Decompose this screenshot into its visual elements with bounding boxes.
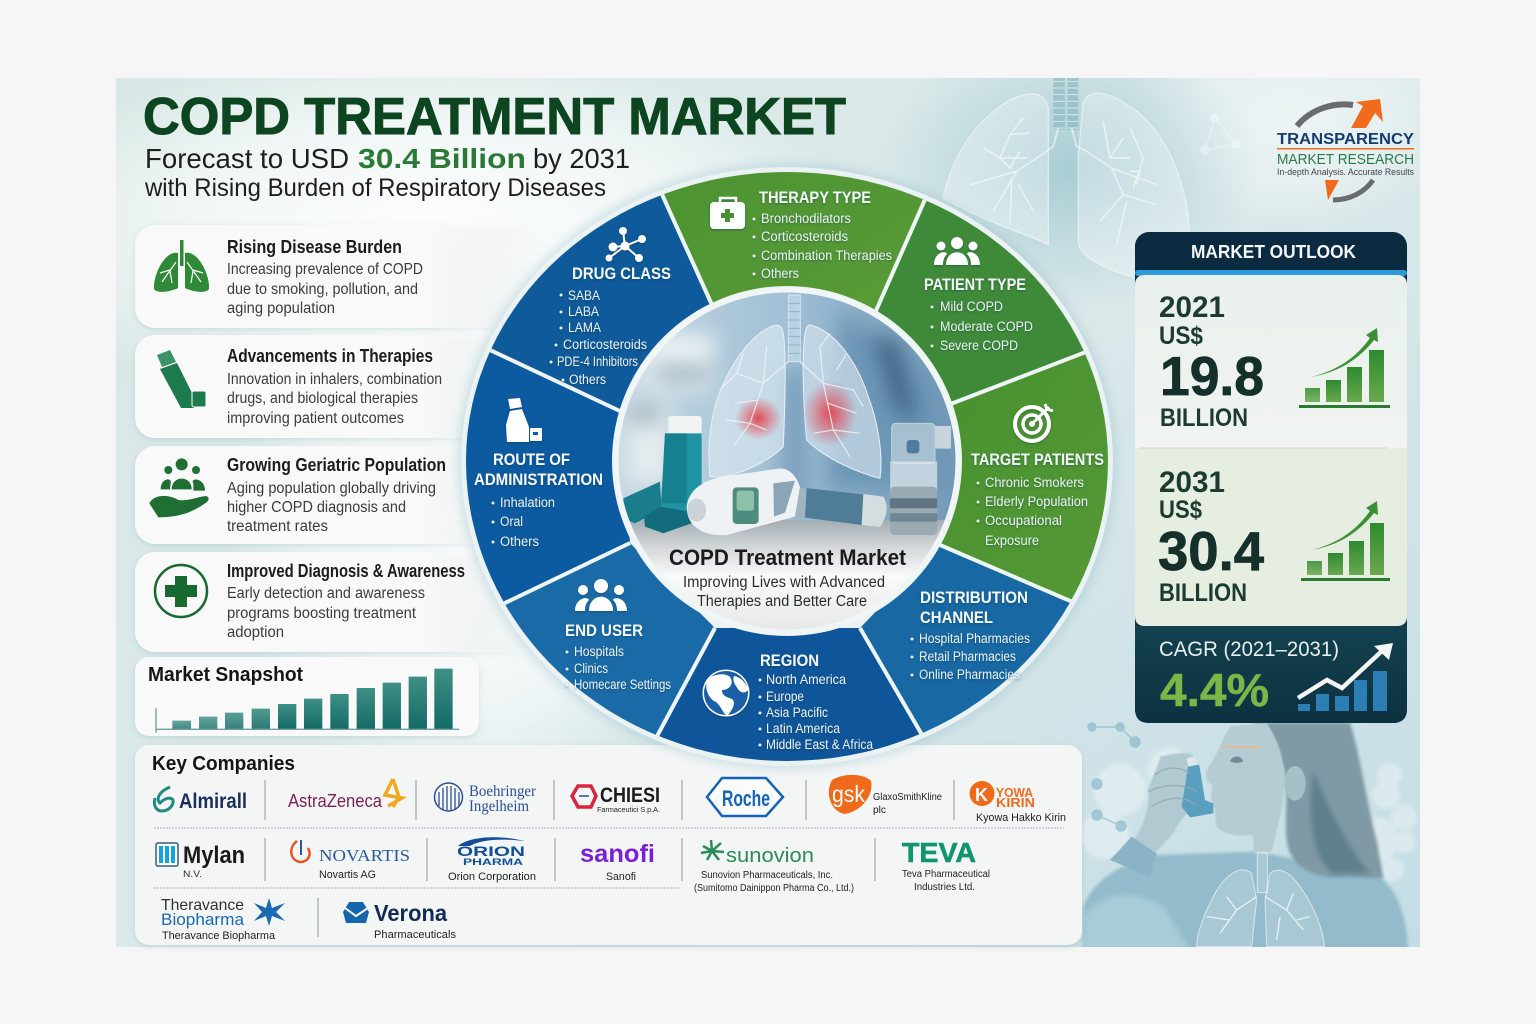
logo: Teva: Teva Pharmaceutical (902, 869, 990, 880)
background bokeh cells (1081, 748, 1417, 882)
segment: therapy type: Combination Therapies (761, 248, 892, 263)
segment: therapy type: Others (761, 266, 799, 281)
logo: Orion Pharma: ORION (457, 843, 525, 859)
segment: target patients: Chronic Smokers (985, 475, 1084, 490)
segment: end user (565, 579, 671, 692)
icon: medical cross circle (155, 565, 207, 617)
segment: patient type: PATIENT TYPE (924, 276, 1026, 294)
logo: Mylan: Mylan (183, 842, 245, 869)
logo: Kyowa Kirin (970, 781, 1066, 824)
icon: medical kit (710, 198, 745, 229)
logo: Chiesi (572, 784, 660, 814)
segment: therapy type: Bronchodilators (761, 211, 851, 226)
panel: market outlook (1135, 232, 1407, 723)
segment: route of administration (474, 398, 603, 549)
segment: drug class: LAMA (568, 320, 601, 335)
icon: white inhaler (506, 398, 542, 442)
text: diagnosis description: programs boosting treatment (227, 605, 417, 622)
logo: Verona: Pharmaceuticals (374, 929, 456, 941)
background molecule near woman (1088, 723, 1140, 831)
logo: Novartis: Novartis AG (319, 869, 376, 881)
lung right (803, 325, 881, 478)
segment: drug class: PDE-4 Inhibitors (557, 354, 638, 369)
chart: CAGR bars and arrow (1298, 643, 1393, 711)
text: advancements description: drugs, and biological therapies (227, 390, 418, 407)
subtitle line two: with Rising Burden of Respiratory Diseases (144, 174, 606, 202)
logo: Boehringer Ingelheim: Ingelheim (469, 798, 529, 815)
segment: target patients: Elderly Population (985, 494, 1088, 509)
subtitle line one (145, 143, 630, 174)
logo: Transparency Market Research: TRANSPARENCY (1277, 131, 1414, 148)
bar chart: market snapshot (156, 669, 459, 733)
icon: end user group (575, 579, 627, 611)
chart: 2031 growth bars (1301, 501, 1390, 581)
card: 2031 value: 30.4 (1158, 520, 1264, 582)
segment: region: Europe (766, 689, 804, 704)
segment: target patients: Occupational (985, 513, 1062, 528)
panel: driver card advancements in therapies (135, 335, 535, 438)
logo: Chiesi: Farmaceutici S.p.A. (597, 805, 660, 814)
chart: 2021 growth bars (1299, 328, 1390, 408)
logo: Theravance Biopharma (161, 897, 285, 942)
card: CAGR (1135, 626, 1407, 723)
logo: Novartis (291, 840, 410, 881)
card: CAGR: 4.4% (1160, 664, 1269, 716)
logo: AstraZeneca (288, 779, 402, 811)
logo: Theravance Biopharma: Theravance Biopharma (162, 930, 276, 942)
logo: Sunovion: sunovion (726, 845, 814, 867)
logo: GSK: gsk (832, 781, 865, 807)
logo: Kyowa Kirin: K (975, 785, 988, 805)
logo: Mylan (156, 842, 245, 880)
white device (687, 468, 800, 535)
segment: patient type: Mild COPD (940, 299, 1003, 314)
logo: Teva: TEVA (902, 837, 976, 868)
logo: Almirall: Almirall (179, 790, 247, 813)
segment: end user: Clinics (574, 661, 608, 676)
logo: Teva: Industries Ltd. (914, 882, 975, 893)
spacer device (890, 423, 951, 535)
center subtitle: Improving Lives with Advanced (683, 574, 885, 591)
teal inhalers (623, 416, 702, 533)
subtitle line one: Forecast to USD (145, 143, 349, 174)
icon: patient group (934, 237, 980, 265)
segment: region: REGION (760, 652, 819, 670)
logo: Almirall (154, 787, 247, 813)
logo: Transparency Market Research (1277, 99, 1414, 200)
segment: drug class: SABA (568, 288, 600, 303)
title: COPD TREATMENT MARKET (143, 88, 846, 146)
heading: key companies: Key Companies (152, 752, 295, 775)
segment: end user: Homecare Settings (574, 677, 671, 692)
segment: route of administration: Inhalation (500, 495, 555, 510)
center heading: COPD Treatment Market (669, 545, 906, 570)
logo: Kyowa Kirin: KIRIN (996, 795, 1035, 810)
segment: end user: END USER (565, 622, 643, 640)
illustration: woman using inhaler (1083, 723, 1408, 950)
segment: drug class: LABA (568, 304, 599, 319)
segment: region: Asia Pacific (766, 705, 828, 720)
logo: Mylan: N.V. (183, 869, 202, 880)
logo: Sanofi: sanofi (580, 840, 655, 868)
logo: Roche: Roche (722, 786, 770, 811)
segment: target patients: Exposure (985, 533, 1039, 548)
infographic background panel (116, 78, 1420, 947)
segment: drug class: Corticosteroids (563, 337, 647, 352)
logo: AstraZeneca: AstraZeneca (288, 791, 383, 811)
segment: patient type (924, 237, 1033, 353)
logo: Sanofi (580, 840, 655, 883)
panel: driver card growing geriatric population (135, 446, 535, 544)
logo: Kyowa Kirin: Kyowa Hakko Kirin (976, 812, 1066, 824)
table with fade (630, 520, 945, 630)
logo: Teva (902, 837, 990, 893)
card: 2021 value: 19.8 (1160, 345, 1264, 407)
text: rising disease burden description: Increasing prevalence of COPD (227, 261, 423, 278)
card: 2031 value (1135, 448, 1407, 626)
icon: green lungs (154, 240, 209, 292)
wheel: segmentation (454, 160, 1119, 774)
segment: region: Middle East & Africa (766, 737, 873, 752)
text: advancements description: Innovation in inhalers, combination (227, 371, 442, 388)
logo: Theravance Biopharma: Biopharma (161, 910, 245, 929)
card: 2021 value: BILLION (1160, 404, 1248, 432)
subtitle line one: 30.4 Billion (358, 143, 526, 174)
subtitle line one: by 2031 (533, 143, 630, 174)
logo: GSK (829, 775, 942, 816)
text: advancements description (227, 371, 442, 427)
text: diagnosis description (227, 585, 425, 641)
logo: Sunovion: (Sumitomo Dainippon Pharma Co., Ltd.) (694, 883, 854, 894)
card: 2021 value (1135, 275, 1407, 448)
text: geriatric description: treatment rates (227, 518, 328, 535)
logo: Transparency Market Research: MARKET RESEARCH (1277, 151, 1414, 168)
logo: Orion Pharma: PHARMA (463, 857, 523, 868)
logo: Sunovion (694, 840, 854, 894)
logo: GSK: plc (873, 805, 886, 816)
segment: therapy type (710, 189, 892, 281)
segment: distribution channel: Hospital Pharmacies (919, 631, 1030, 646)
segment: end user: Hospitals (574, 644, 624, 659)
heading: advancements in therapies: Advancements in Therapies (227, 346, 433, 366)
heading: market snapshot: Market Snapshot (148, 664, 303, 686)
segment: patient type: Severe COPD (940, 338, 1018, 353)
logo: Boehringer Ingelheim (434, 783, 537, 815)
text: geriatric description: higher COPD diagnosis and (227, 499, 406, 516)
panel: market snapshot (135, 657, 479, 736)
center image: lungs and inhalers (612, 286, 963, 636)
logo: Sunovion: Sunovion Pharmaceuticals, Inc. (701, 870, 833, 881)
panel: driver card improved diagnosis and awareness (135, 552, 535, 652)
text: diagnosis description: adoption (227, 624, 284, 641)
heading: growing geriatric population: Growing Geriatric Population (227, 455, 446, 475)
segment: target patients: TARGET PATIENTS (971, 451, 1104, 469)
segment: route of administration: ROUTE OF (493, 451, 570, 469)
segment: drug class (550, 228, 671, 387)
heading: market outlook: MARKET OUTLOOK (1191, 241, 1357, 262)
heading: rising disease burden: Rising Disease Burden (227, 237, 402, 257)
card: 2021 value: US$ (1159, 322, 1203, 350)
text: rising disease burden description: due to smoking, pollution, and (227, 281, 418, 298)
card: 2031 value: BILLION (1159, 579, 1247, 607)
segment: drug class: Others (569, 372, 606, 387)
segment: distribution channel (910, 589, 1030, 682)
logo: Chiesi: CHIESI (600, 784, 660, 807)
logo: Boehringer Ingelheim: Boehringer (469, 783, 537, 800)
segment: distribution channel: CHANNEL (920, 609, 993, 627)
segment: distribution channel: Retail Pharmacies (919, 649, 1016, 664)
icon: molecule network (606, 228, 646, 262)
text: geriatric description (227, 480, 436, 535)
trachea (788, 295, 800, 362)
text: geriatric description: Aging population globally driving (227, 480, 436, 497)
logo: Orion Pharma (448, 837, 536, 883)
background molecule (1201, 114, 1240, 154)
logo: Novartis: NOVARTIS (319, 846, 410, 865)
card: 2031 value: US$ (1159, 496, 1202, 524)
logo: Kyowa Kirin: YOWA (996, 785, 1034, 800)
text: diagnosis description: Early detection and awareness (227, 585, 425, 602)
panel: key companies (135, 745, 1082, 945)
segment: region: North America (766, 672, 846, 687)
center subtitle: Therapies and Better Care (697, 593, 867, 610)
logo: Orion Pharma: Orion Corporation (448, 871, 536, 883)
grey inhaler (789, 487, 887, 527)
panel: driver card rising disease burden (135, 225, 545, 328)
segment: therapy type: Corticosteroids (761, 229, 848, 244)
logo: GSK: GlaxoSmithKline (873, 792, 942, 803)
card: 2031 value: 2031 (1159, 466, 1225, 499)
lung left (709, 325, 785, 477)
segment: route of administration: Others (500, 534, 539, 549)
background lungs illustration (943, 76, 1190, 278)
logo: Theravance Biopharma: Theravance (161, 897, 244, 914)
logo: Verona: Verona (374, 900, 447, 926)
card: CAGR: CAGR (2021–2031) (1159, 638, 1339, 661)
heading: improved diagnosis and awareness: Improved Diagnosis & Awareness (227, 561, 465, 581)
text: rising disease burden description (227, 261, 423, 317)
icon: target with arrow (1015, 404, 1053, 441)
text: rising disease burden description: aging population (227, 300, 335, 317)
segment: region (702, 652, 873, 752)
segment: route of administration: ADMINISTRATION (474, 471, 603, 489)
segment: distribution channel: DISTRIBUTION (920, 589, 1028, 607)
center subtitle (683, 574, 885, 610)
segment: target patients (971, 404, 1104, 548)
segment: therapy type: THERAPY TYPE (759, 189, 871, 207)
segment: region: Latin America (766, 721, 840, 736)
logo: Sanofi: Sanofi (606, 871, 636, 883)
segment: route of administration: Oral (500, 514, 523, 529)
segment: patient type: Moderate COPD (940, 319, 1033, 334)
icon: globe (702, 670, 750, 716)
logo: Transparency Market Research: In-depth Analysis. Accurate Results (1277, 167, 1414, 177)
logo: Roche (707, 778, 783, 816)
logo: Verona (343, 900, 456, 941)
segment: distribution channel: Online Pharmacies (919, 667, 1020, 682)
card: 2021 value: 2021 (1159, 291, 1225, 324)
icon: green inhaler (157, 350, 206, 408)
text: advancements description: improving patient outcomes (227, 410, 404, 427)
segment: drug class: DRUG CLASS (572, 265, 671, 283)
icon: people in hand (149, 458, 209, 517)
